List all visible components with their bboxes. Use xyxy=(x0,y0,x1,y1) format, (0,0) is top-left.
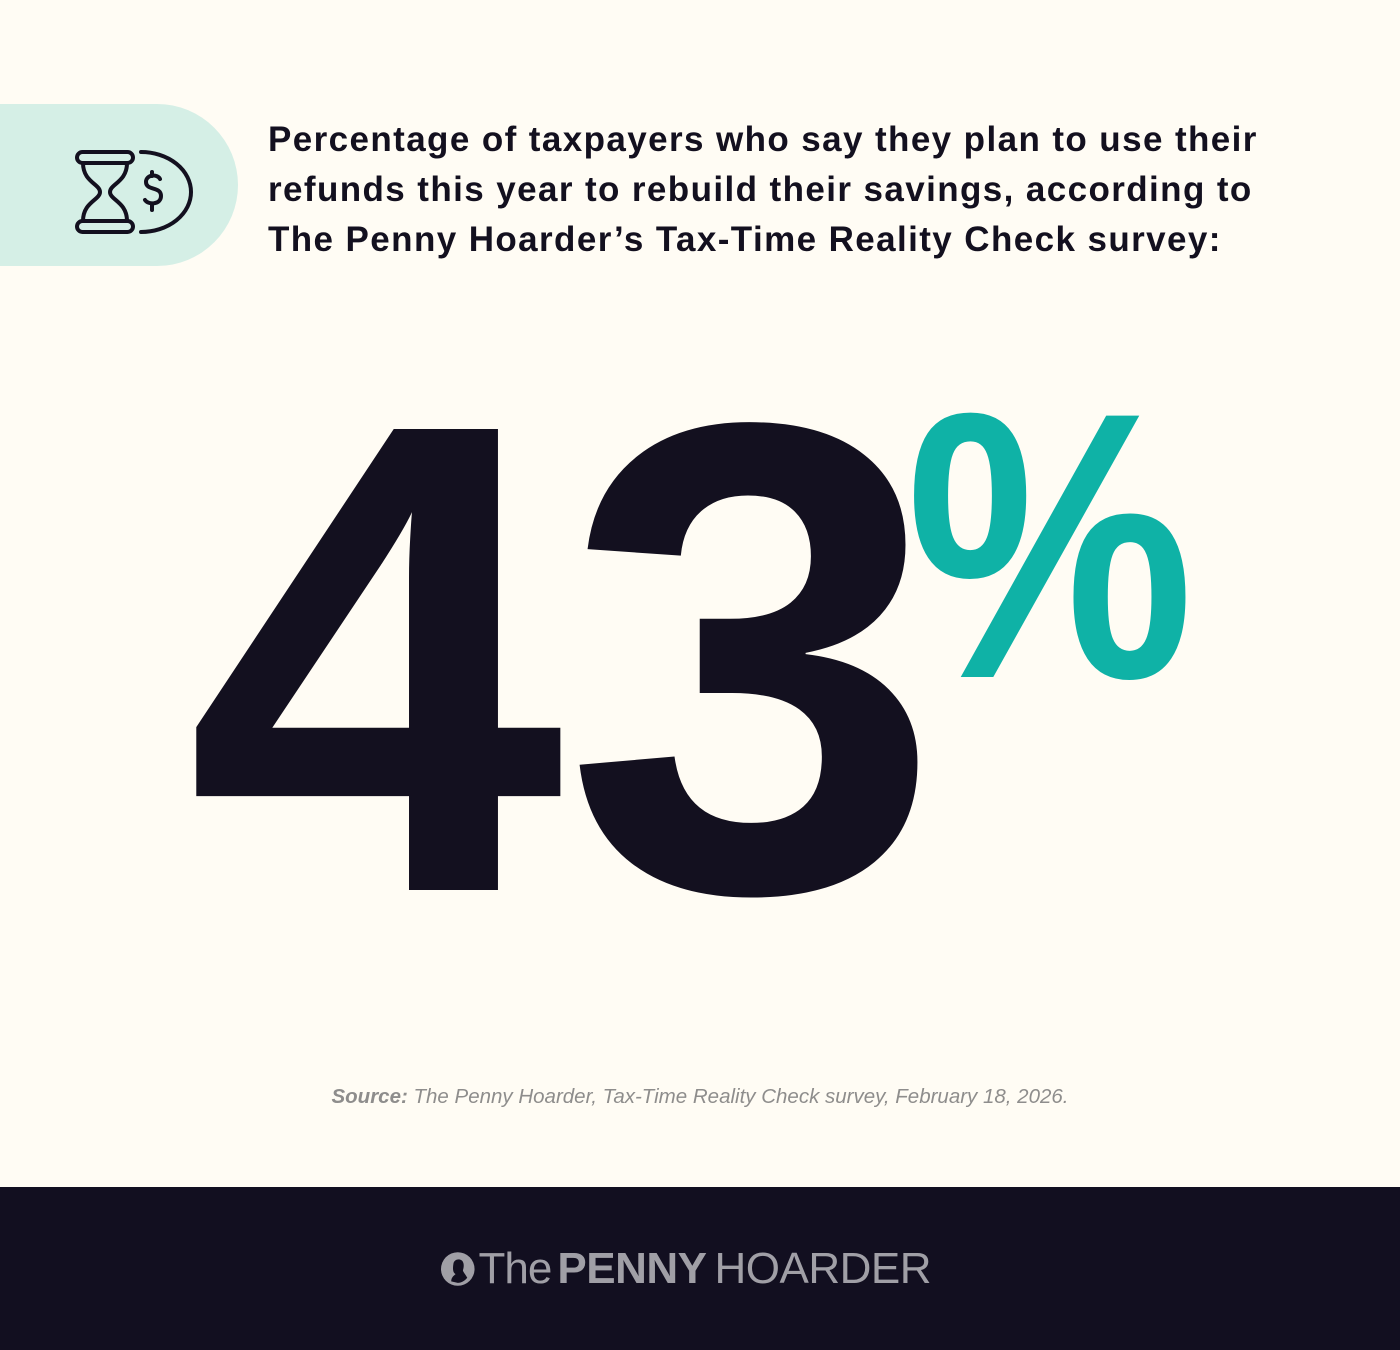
title xyxy=(268,120,1258,259)
footer with logo: PENNY xyxy=(557,1244,706,1293)
footer with logo: HOARDER xyxy=(714,1244,931,1293)
footer with logo xyxy=(0,1187,1400,1350)
footer with logo: The xyxy=(479,1244,551,1293)
title: The Penny Hoarder’s Tax-Time Reality Check survey: xyxy=(268,220,1222,259)
title: Percentage of taxpayers who say they plan to use their xyxy=(268,120,1258,159)
source note: Source: The Penny Hoarder, Tax-Time Reality Check survey, February 18, 2026. xyxy=(331,1085,1068,1108)
icon badge: hourglass and coin xyxy=(0,104,238,266)
title: refunds this year to rebuild their savings, according to xyxy=(268,170,1253,209)
